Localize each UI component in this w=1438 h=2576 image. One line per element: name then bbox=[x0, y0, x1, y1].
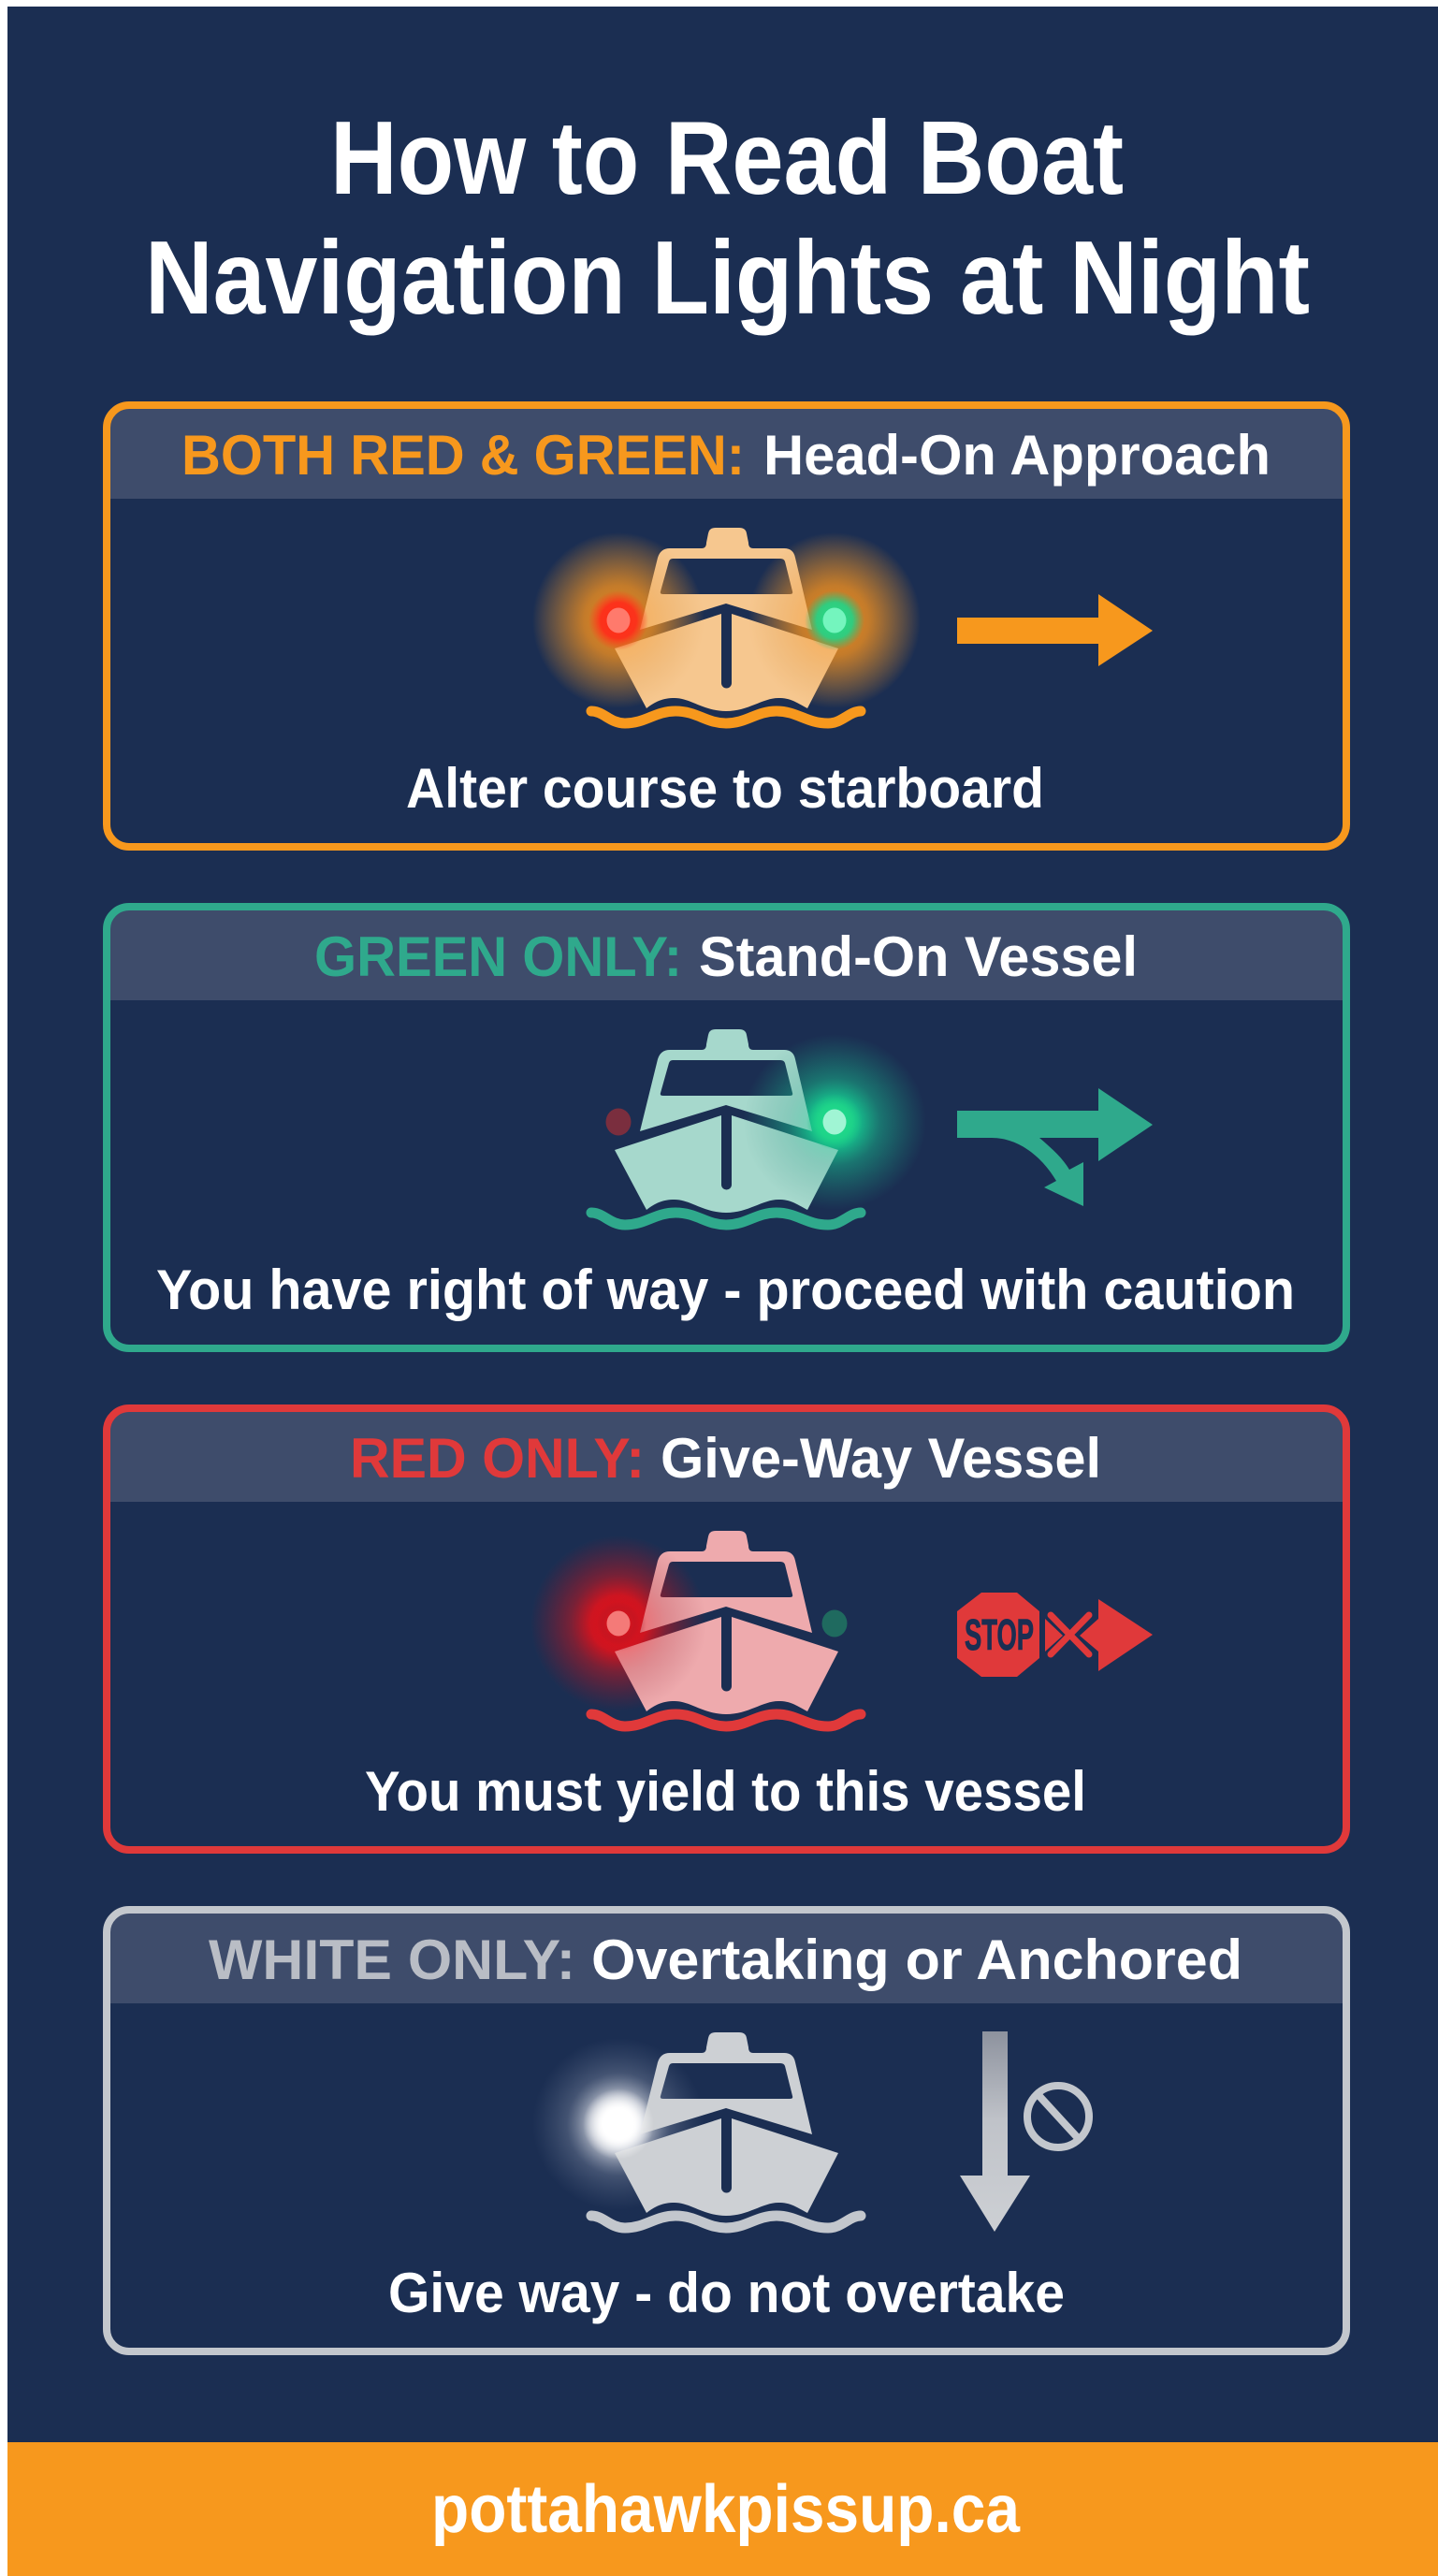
title: Navigation Lights at Night bbox=[145, 220, 1310, 336]
panel header band bbox=[107, 1910, 1346, 2003]
arrow: straight bbox=[957, 594, 1153, 666]
heading: Head-On Approach bbox=[763, 424, 1271, 487]
icon: boat with white light bbox=[532, 2032, 861, 2228]
instruction text: Give way - do not overtake bbox=[388, 2262, 1065, 2324]
icon: boat with red light bbox=[530, 1531, 861, 1726]
icon: prohibition sign bbox=[1027, 2086, 1089, 2147]
heading bbox=[314, 925, 1138, 988]
heading bbox=[350, 1427, 1101, 1490]
heading: WHITE ONLY: bbox=[209, 1928, 575, 1991]
panel border bbox=[107, 1910, 1346, 2351]
title: How to Read Boat bbox=[330, 100, 1124, 216]
panel: white only bbox=[107, 1910, 1346, 2351]
footer bar bbox=[7, 2442, 1438, 2576]
panel border bbox=[107, 405, 1346, 847]
instruction text: You have right of way - proceed with caution bbox=[156, 1259, 1295, 1321]
panel border bbox=[107, 907, 1346, 1348]
arrow: forward with branch bbox=[957, 1088, 1153, 1206]
panel: red only bbox=[107, 1408, 1346, 1850]
heading: GREEN ONLY: bbox=[314, 925, 682, 988]
instruction text: Alter course to starboard bbox=[406, 757, 1044, 820]
panel: green only bbox=[107, 907, 1346, 1348]
panel border bbox=[107, 1408, 1346, 1850]
footer url: pottahawkpissup.ca bbox=[431, 2472, 1021, 2547]
title bbox=[145, 100, 1310, 336]
panel header band bbox=[107, 405, 1346, 499]
icon: stop sign with crossed arrow: STOP bbox=[965, 1610, 1034, 1659]
arrow: down bbox=[960, 2031, 1030, 2232]
heading: Stand-On Vessel bbox=[699, 925, 1138, 988]
heading: RED ONLY: bbox=[350, 1427, 645, 1490]
heading: Overtaking or Anchored bbox=[591, 1928, 1242, 1991]
panel header band bbox=[107, 1408, 1346, 1502]
icon: boat with red and green lights bbox=[532, 528, 921, 723]
heading bbox=[209, 1928, 1242, 1991]
icon: boat with green light bbox=[591, 1029, 926, 1225]
icon: stop sign with crossed arrow bbox=[957, 1593, 1153, 1677]
panel: both red and green bbox=[107, 405, 1346, 847]
heading: Give-Way Vessel bbox=[661, 1427, 1101, 1490]
heading bbox=[182, 424, 1271, 487]
instruction text: You must yield to this vessel bbox=[365, 1760, 1086, 1823]
heading: BOTH RED & GREEN: bbox=[182, 424, 745, 487]
panel header band bbox=[107, 907, 1346, 1000]
